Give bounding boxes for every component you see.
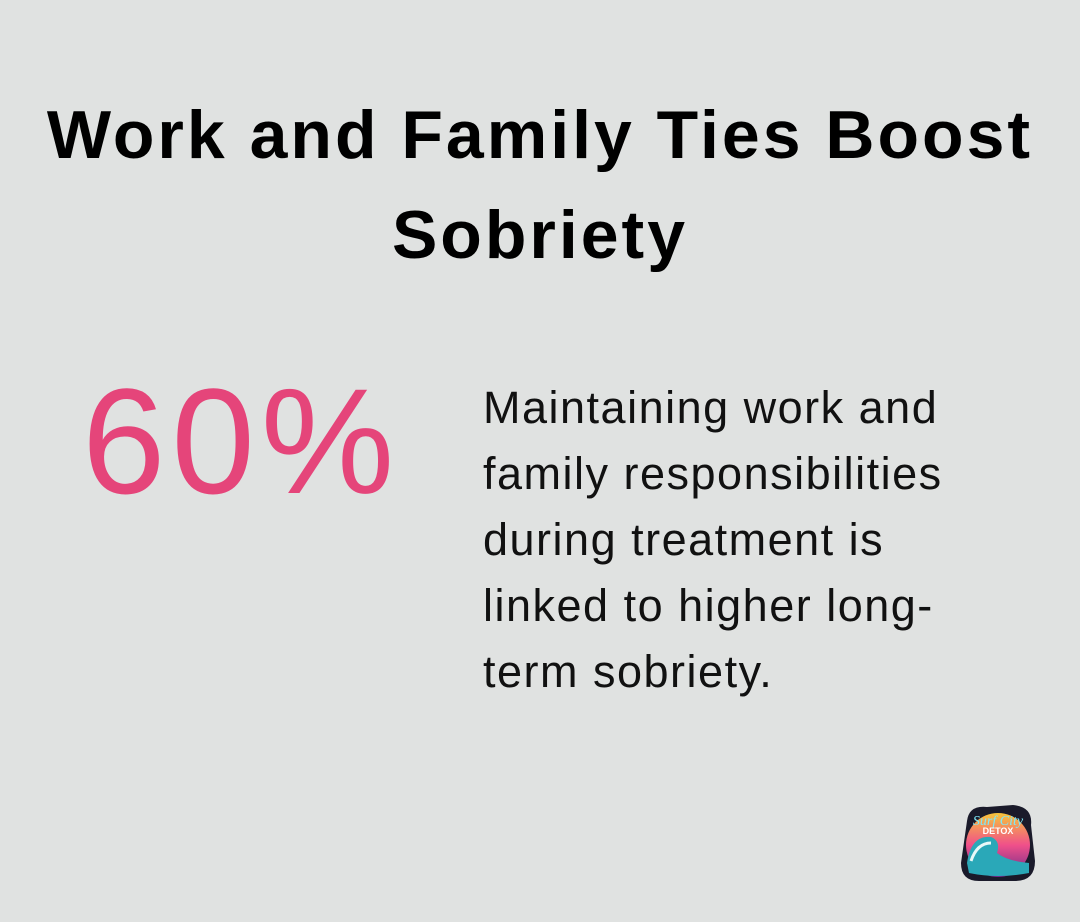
description text: linked to higher long- [483, 580, 934, 631]
icon: logo: DETOX [983, 826, 1013, 836]
title: Sobriety [392, 197, 688, 273]
icon: logo [961, 805, 1035, 881]
statistic: 60%: 60% [82, 357, 400, 525]
description text [483, 382, 943, 697]
description text: term sobriety. [483, 646, 773, 697]
description text: during treatment is [483, 514, 884, 565]
description text: Maintaining work and [483, 382, 938, 433]
title [47, 97, 1033, 273]
description text: family responsibilities [483, 448, 943, 499]
title: Work and Family Ties Boost [47, 97, 1033, 173]
icon: logo: Surf City [973, 814, 1024, 829]
